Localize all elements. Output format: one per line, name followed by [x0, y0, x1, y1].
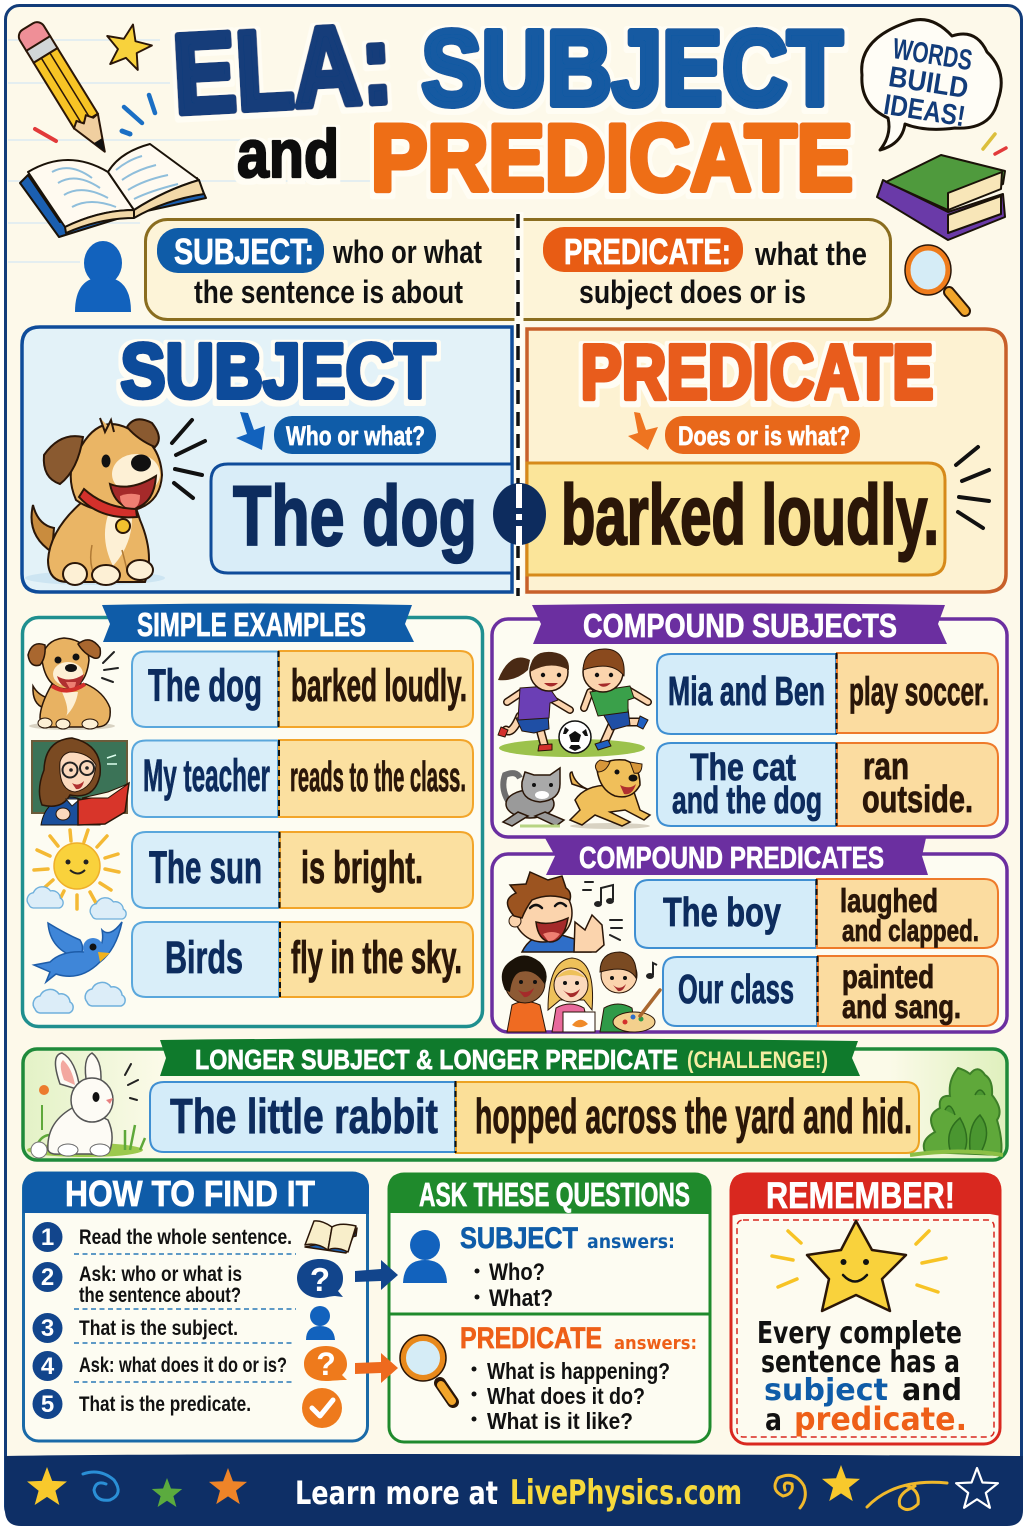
icon: magnifier: [905, 245, 965, 311]
divider badge: [493, 483, 546, 546]
predicate answers: What does it do?: [487, 1383, 645, 1409]
pill: who or what: Who or what?: [286, 421, 425, 451]
icon: yellow star top: [102, 20, 155, 72]
arrow: subject: [236, 412, 265, 450]
panel: longer subject and predicate: [23, 1038, 1007, 1160]
speech bubble: WORDS: [890, 33, 974, 77]
row: the sun is bright: is bright.: [301, 842, 423, 893]
predicate answers: answers:: [614, 1333, 697, 1354]
predicate answers: What is it like?: [487, 1408, 633, 1434]
footer: [5, 1454, 1023, 1526]
speech bubble: IDEAS!: [881, 89, 967, 133]
icon: person: [75, 241, 131, 312]
sentence part: the dog: The dog: [233, 469, 477, 563]
row: our class painted and sang: Our class: [678, 966, 794, 1012]
panel: simple examples: reads to the class.: [290, 753, 466, 800]
row: the cat and the dog ran outside: [657, 743, 998, 826]
panel: compound predicates: [492, 837, 1007, 1032]
speech bubble: [862, 20, 1001, 150]
panel: subject: [22, 327, 512, 592]
row: the dog barked loudly: [132, 651, 473, 727]
icon: sparkle marks near pencil: [35, 95, 155, 141]
predicate pill: PREDICATE:: [564, 231, 731, 272]
remember message: subject: [764, 1373, 888, 1408]
subject definition: the sentence is about: [194, 274, 463, 310]
predicate definition: [579, 236, 867, 310]
remember message: and: [902, 1373, 962, 1408]
subject pill: SUBJECT:: [174, 231, 314, 272]
banner: challenge: [160, 1038, 860, 1076]
challenge tag: (CHALLENGE!): [687, 1047, 828, 1074]
footer link: LivePhysics.com: [510, 1473, 742, 1513]
subject answers: [460, 1222, 675, 1312]
icon: bush: [910, 1068, 1003, 1155]
row: the boy laughed and clapped: [635, 879, 998, 948]
heading: remember: REMEMBER!: [766, 1175, 955, 1216]
banner: compound subjects: COMPOUND SUBJECTS: [583, 607, 897, 644]
remember message: Every complete: [757, 1316, 962, 1351]
panel: simple examples: [22, 604, 482, 1026]
step 5: [32, 1389, 251, 1419]
remember message: sentence has a: [761, 1345, 960, 1380]
row: the boy laughed and clapped: laughed: [840, 882, 938, 919]
banner text: LONGER SUBJECT & LONGER PREDICATE: [195, 1044, 678, 1075]
predicate answers: PREDICATE: [460, 1322, 602, 1355]
row: my teacher reads to the class: My teacher: [143, 750, 270, 801]
row: the little rabbit hopped across the yard and hid: The little rabbit: [170, 1090, 438, 1144]
title: [170, 1, 853, 210]
predicate answers: [460, 1322, 697, 1434]
icon: bird: [33, 922, 125, 1013]
heading: subject: SUBJECT: [120, 328, 436, 414]
remember message: [757, 1316, 967, 1438]
icon: laughing boy clapping: [507, 872, 622, 952]
step 2: Ask: who or what is: [79, 1263, 242, 1286]
row: the dog barked loudly: barked loudly.: [291, 660, 467, 711]
title word: ELA: ELA:: [170, 1, 395, 137]
divider: subject and predicate dashed line: [518, 212, 519, 596]
decorative stars left: [27, 1467, 247, 1507]
step 1: Read the whole sentence.: [79, 1226, 292, 1249]
icon: teacher: [32, 738, 129, 825]
row: our class painted and sang: [663, 956, 998, 1026]
step 3: That is the subject.: [79, 1317, 238, 1340]
icon: orange question bubble: ?: [316, 1346, 336, 1382]
step 1: [32, 1222, 292, 1252]
row: the sun is bright: The sun: [149, 842, 262, 893]
row: the cat and the dog ran outside: The cat: [690, 747, 796, 789]
step 1: 1: [41, 1224, 54, 1251]
row: the sun is bright: [132, 832, 473, 908]
row: mia and ben play soccer: [657, 653, 998, 734]
step 3: [32, 1313, 238, 1343]
speech bubble: BUILD: [886, 61, 970, 105]
row: our class painted and sang: painted: [842, 958, 934, 995]
footer text: Learn more at: [295, 1474, 498, 1512]
definition box: [146, 220, 890, 320]
pill: who or what: [274, 416, 436, 454]
icon: sparkle marks near books: [983, 134, 1006, 154]
sound marks: [956, 447, 989, 528]
icon: orange check: [302, 1388, 342, 1428]
banner: compound predicates: COMPOUND PREDICATES: [579, 840, 884, 875]
banner: simple examples: SIMPLE EXAMPLES: [137, 606, 366, 643]
icon: big dog: [25, 418, 205, 585]
icon: children playing soccer: [498, 649, 648, 757]
row: mia and ben play soccer: Mia and Ben: [668, 668, 825, 714]
icon: orange question bubble: [304, 1346, 347, 1382]
icon: magnifier: [400, 1335, 453, 1402]
pill: does or is what: Does or is what?: [678, 421, 850, 451]
remember message: a: [765, 1403, 782, 1438]
icon: three children with art: [502, 952, 660, 1032]
sentence part: barked loudly: [527, 463, 945, 575]
row: the cat and the dog ran outside: and the dog: [672, 780, 822, 822]
panel: ask these questions: [388, 1173, 711, 1442]
row: our class painted and sang: and sang.: [842, 988, 961, 1025]
row: birds fly in the sky: [132, 922, 473, 997]
row: my teacher reads to the class: [132, 740, 473, 817]
step 2: the sentence about?: [79, 1284, 241, 1307]
panel: predicate: [527, 329, 1006, 592]
step 5: That is the predicate.: [79, 1393, 251, 1416]
step 4: Ask: what does it do or is?: [79, 1354, 287, 1377]
icon: rabbit: [27, 1053, 145, 1158]
panel: how to find it: [23, 1172, 369, 1441]
title word: and: and: [237, 116, 339, 192]
heading: predicate: PREDICATE: [580, 330, 934, 416]
row: the cat and the dog ran outside: ran: [863, 746, 909, 788]
title word: SUBJECT: SUBJECT: [422, 10, 842, 128]
pill: does or is what: [665, 416, 860, 454]
title word: PREDICATE: PREDICATE: [371, 105, 853, 210]
row: the dog barked loudly: The dog: [148, 660, 262, 711]
step 2: [32, 1262, 242, 1307]
icon: stacked books: [877, 155, 1005, 240]
icon: blue person: [306, 1306, 335, 1340]
step 2: 2: [41, 1264, 54, 1291]
panel: remember: [730, 1173, 1001, 1444]
heading: how to find it: HOW TO FIND IT: [65, 1173, 315, 1214]
icon: smiling star: [772, 1221, 946, 1311]
icon: person: [403, 1230, 447, 1283]
icon: small book: [305, 1221, 357, 1253]
subject answers: What?: [489, 1285, 553, 1312]
predicate definition: what the: [754, 236, 867, 272]
row: birds fly in the sky: fly in the sky.: [291, 932, 462, 983]
icon: blue question bubble: [297, 1259, 343, 1298]
icon: blue question bubble: ?: [310, 1261, 330, 1298]
arrow: orange to predicate: [355, 1353, 398, 1383]
icon: cat: [503, 768, 564, 826]
predicate answers: What is happening?: [487, 1358, 670, 1384]
icon: sun: [27, 830, 126, 919]
remember message: predicate.: [794, 1400, 967, 1438]
soccer ball: [559, 721, 591, 753]
subject definition: [194, 234, 482, 310]
step 4: 4: [41, 1353, 55, 1380]
icon: pencil: [16, 19, 117, 159]
subject answers: SUBJECT: [460, 1222, 578, 1255]
row: the little rabbit hopped across the yard and hid: [150, 1081, 919, 1153]
predicate definition: subject does or is: [579, 274, 806, 310]
icon: open book: [20, 144, 206, 237]
arrow: predicate: [628, 412, 658, 450]
step 4: [32, 1351, 287, 1381]
step 3: 3: [41, 1315, 54, 1342]
arrow: blue to subject: [355, 1260, 398, 1290]
step 5: 5: [41, 1391, 54, 1418]
subject definition: who or what: [332, 234, 482, 270]
panel: compound subjects: [492, 604, 1007, 837]
row: the cat and the dog ran outside: outside.: [862, 779, 973, 821]
decorative marks right: [775, 1465, 998, 1510]
row: the boy laughed and clapped: The boy: [663, 889, 781, 935]
icon: running dog: [570, 760, 650, 829]
heading: ask these questions: ASK THESE QUESTIONS: [419, 1176, 690, 1213]
boy: [583, 649, 648, 750]
icon: small dog: [28, 638, 118, 730]
row: birds fly in the sky: Birds: [165, 932, 243, 983]
girl: [498, 652, 570, 751]
predicate pill: [543, 227, 743, 272]
subject answers: answers:: [587, 1231, 675, 1253]
subject answers: Who?: [489, 1259, 545, 1286]
